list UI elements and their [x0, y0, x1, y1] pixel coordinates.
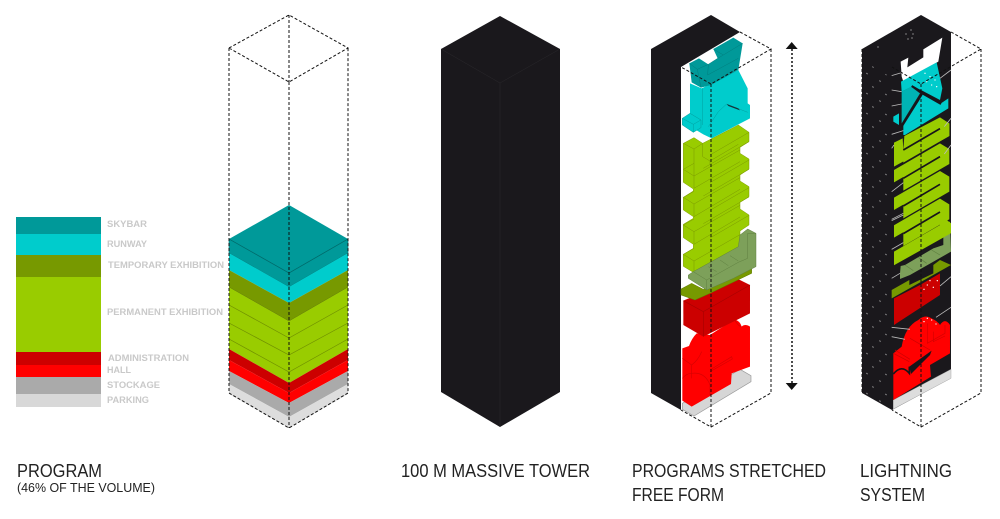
dashed tower outline	[681, 32, 771, 427]
caption: programs stretched: PROGRAMS STRETCHED	[632, 461, 826, 481]
lightning ray lines	[892, 70, 951, 219]
caption: program	[17, 461, 155, 495]
diagram: program volume stacked in dashed tower	[229, 15, 348, 428]
runway volume	[682, 70, 750, 138]
caption: lightning system: LIGHTNING	[860, 461, 952, 481]
hall carved red	[893, 317, 950, 400]
white skylight void	[901, 38, 942, 82]
parking slab	[682, 369, 751, 416]
skybar volume	[689, 38, 743, 88]
roof dots	[877, 29, 914, 48]
runway cyan with dark ramp	[893, 62, 948, 135]
permanent exhibition green slots	[894, 117, 951, 265]
black shell: roof and left wall	[651, 15, 740, 410]
diagram: lightning system	[862, 15, 981, 427]
legend labels: PARKING	[107, 395, 149, 405]
parking slab	[893, 369, 951, 409]
caption: massive tower: 100 M MASSIVE TOWER	[401, 461, 590, 481]
caption: lightning system	[860, 461, 952, 505]
temporary exhibition grey-green ramp	[900, 222, 951, 279]
legend labels: RUNWAY	[107, 239, 147, 249]
caption: programs stretched	[632, 461, 826, 505]
caption: program: (46% OF THE VOLUME)	[17, 480, 155, 495]
legend labels	[107, 219, 224, 405]
permanent exhibition: green stretched bars	[683, 125, 749, 273]
hall volume	[682, 319, 750, 407]
black perforated tower body	[862, 15, 951, 410]
legend labels: STOCKAGE	[107, 380, 160, 390]
temporary exhibition olive floor	[892, 260, 951, 298]
legend labels: HALL	[107, 365, 131, 375]
administration dark red	[894, 273, 940, 325]
diagram: programs stretched free form	[651, 15, 798, 427]
legend labels: TEMPORARY EXHIBITION	[108, 260, 224, 270]
caption: programs stretched: FREE FORM	[632, 485, 724, 505]
caption: program: PROGRAM	[17, 461, 102, 481]
legend: program colour stack	[16, 217, 101, 407]
temporary exhibition: olive floor	[681, 265, 752, 300]
legend labels: PERMANENT EXHIBITION	[107, 307, 223, 317]
dashed tower outline	[862, 32, 981, 427]
administration volume	[683, 278, 750, 337]
legend labels: SKYBAR	[107, 219, 148, 229]
lightning dots on the wall	[862, 60, 892, 410]
diagram: 100 m massive tower	[441, 16, 560, 427]
icon: double-headed vertical height arrow	[786, 42, 798, 390]
temporary exhibition: grey-green ramp	[688, 229, 756, 290]
legend labels: ADMINISTRATION	[108, 353, 189, 363]
caption: lightning system: SYSTEM	[860, 485, 925, 505]
black slot lines between green bars	[903, 129, 940, 234]
lower lightning ray lines	[892, 215, 951, 339]
